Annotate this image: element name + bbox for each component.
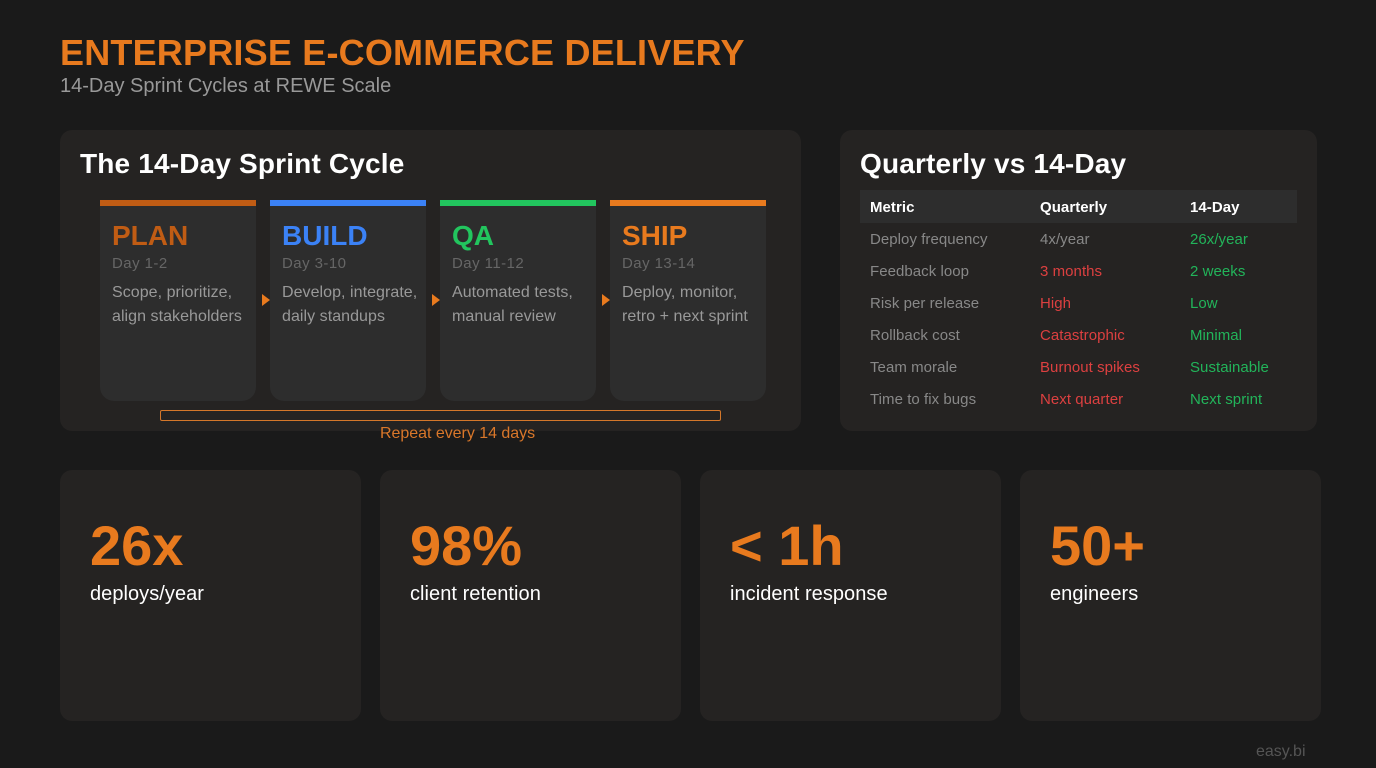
ship description: Deploy, monitor, [622, 284, 737, 301]
row: deploy frequency: 4x/year [1040, 231, 1090, 248]
plan days: Day 1-2 [112, 255, 168, 272]
row: rollback cost: Catastrophic [1040, 327, 1125, 344]
title: ENTERPRISE E-COMMERCE DELIVERY [60, 32, 745, 73]
ship description [622, 284, 748, 325]
plan description: align stakeholders [112, 308, 242, 325]
build description: Develop, integrate, [282, 284, 417, 301]
row: rollback cost: Minimal [1190, 327, 1242, 344]
arrow: build to qa [432, 294, 440, 306]
row: rollback cost: Rollback cost [870, 327, 960, 344]
kpi: engineers [1020, 470, 1321, 721]
kpi value: 50+ [1050, 514, 1145, 577]
card: ship [610, 200, 766, 401]
build description: daily standups [282, 308, 385, 325]
kpi label: engineers [1050, 583, 1138, 605]
kpi: retention [380, 470, 681, 721]
ship days: Day 13-14 [622, 255, 695, 272]
row: risk per release: High [1040, 295, 1071, 312]
kpi value: 98% [410, 514, 522, 577]
subtitle: 14-Day Sprint Cycles at REWE Scale [60, 75, 391, 97]
arrow: plan to build [262, 294, 270, 306]
plan description [112, 284, 242, 325]
card: plan [100, 200, 256, 401]
qa description: Automated tests, [452, 284, 573, 301]
row: time to fix bugs: Time to fix bugs [870, 391, 976, 408]
build days: Day 3-10 [282, 255, 346, 272]
heading: comparison: Quarterly vs 14-Day [860, 148, 1126, 179]
kpi label: client retention [410, 583, 541, 605]
arrow: qa to ship [602, 294, 610, 306]
table header: 14-Day [1190, 199, 1240, 216]
kpi value: 26x [90, 514, 183, 577]
qa name: QA [452, 220, 494, 251]
heading: sprint cycle: The 14-Day Sprint Cycle [80, 148, 404, 179]
row: team morale: Team morale [870, 359, 957, 376]
qa days: Day 11-12 [452, 255, 524, 272]
qa description: manual review [452, 308, 556, 325]
row: risk per release: Risk per release [870, 295, 979, 312]
plan description: Scope, prioritize, [112, 284, 232, 301]
repeat loop bar [160, 410, 721, 421]
footer brand: easy.bi [1256, 743, 1306, 760]
row: team morale [870, 359, 1269, 376]
table header: Quarterly [1040, 199, 1107, 216]
comparison table [860, 190, 1297, 408]
row: time to fix bugs: Next sprint [1190, 391, 1262, 408]
kpi value: < 1h [730, 514, 844, 577]
row: feedback loop: 2 weeks [1190, 263, 1245, 280]
panel: comparison [840, 130, 1317, 431]
ship description: retro + next sprint [622, 308, 748, 325]
kpi: incident response [700, 470, 1001, 721]
card: build [270, 200, 426, 401]
plan name: PLAN [112, 220, 188, 251]
qa description [452, 284, 573, 325]
card: qa [440, 200, 596, 401]
row: time to fix bugs [870, 391, 1262, 408]
row: deploy frequency [870, 231, 1248, 248]
row: deploy frequency: 26x/year [1190, 231, 1248, 248]
row: risk per release: Low [1190, 295, 1218, 312]
panel: sprint cycle [60, 130, 801, 431]
table header [860, 190, 1297, 223]
table header: Metric [870, 199, 914, 216]
row: team morale: Burnout spikes [1040, 359, 1140, 376]
row: feedback loop [870, 263, 1245, 280]
kpi label: deploys/year [90, 583, 204, 605]
row: deploy frequency: Deploy frequency [870, 231, 988, 248]
row: feedback loop: Feedback loop [870, 263, 969, 280]
kpi label: incident response [730, 583, 888, 605]
row: rollback cost [870, 327, 1242, 344]
row: time to fix bugs: Next quarter [1040, 391, 1123, 408]
row: risk per release [870, 295, 1218, 312]
kpi: deploys [60, 470, 361, 721]
build description [282, 284, 417, 325]
row: team morale: Sustainable [1190, 359, 1269, 376]
row: feedback loop: 3 months [1040, 263, 1102, 280]
ship name: SHIP [622, 220, 687, 251]
repeat label: Repeat every 14 days [380, 425, 535, 442]
build name: BUILD [282, 220, 368, 251]
